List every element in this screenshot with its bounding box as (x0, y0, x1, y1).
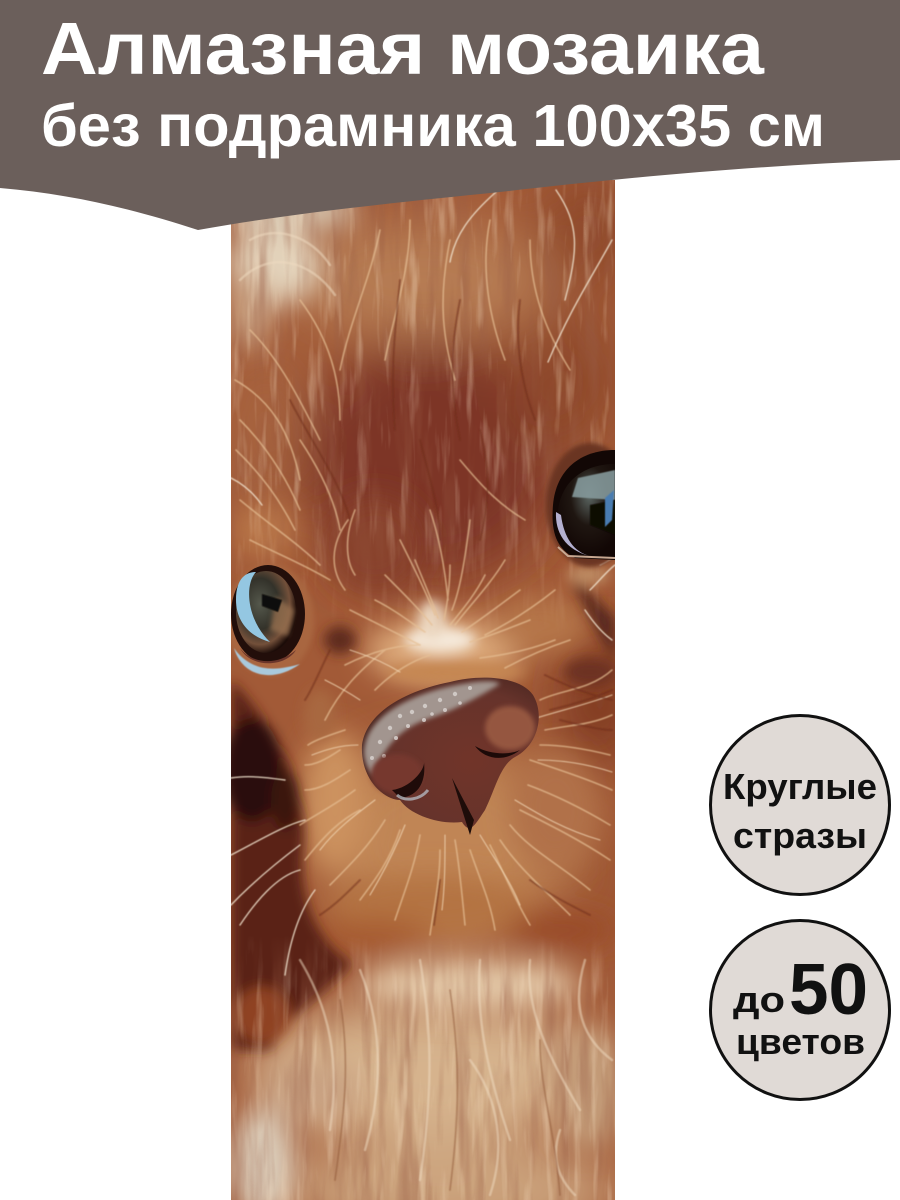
badge: up to 50 colours: цветов (736, 1021, 865, 1062)
badge: up to 50 colours: до (733, 979, 785, 1020)
badge: round rhinestones: стразы (733, 815, 867, 856)
title: Алмазная мозаика (41, 7, 765, 90)
dog fur colour areas (222, 170, 640, 1200)
photo: spaniel puppy close-up (222, 170, 640, 1200)
badge: up to 50 colours (710, 920, 890, 1100)
badge: round rhinestones (710, 716, 890, 894)
icon: nose (362, 678, 539, 835)
icon: right eye (544, 440, 615, 570)
badge: up to 50 colours: 50 (789, 950, 868, 1030)
fur texture: soft long streaks (231, 180, 615, 1200)
badge: round rhinestones: Круглые (723, 766, 877, 807)
fur strands (231, 190, 615, 1195)
icon: left eye (226, 564, 314, 676)
header banner (0, 0, 900, 230)
subtitle: без подрамника 100х35 см (41, 93, 825, 159)
